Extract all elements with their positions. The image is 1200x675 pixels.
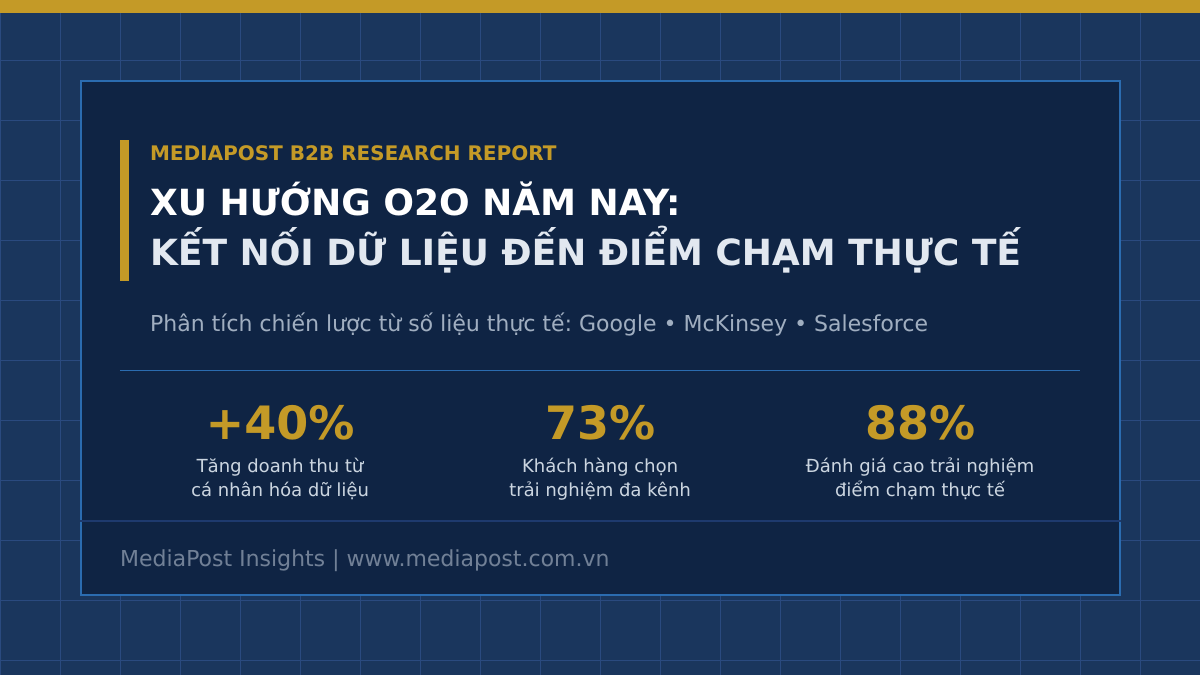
title [150, 181, 1021, 274]
stat value: +40% [206, 396, 354, 450]
stat label [191, 456, 369, 501]
stat label [509, 456, 691, 501]
stat: 73% [509, 396, 691, 501]
accent bar [120, 140, 129, 281]
stat label: Khách hàng chọn [522, 456, 678, 477]
stat: 88% [806, 396, 1034, 501]
panel: main card [81, 81, 1120, 595]
eyebrow heading: MEDIAPOST B2B RESEARCH REPORT [150, 141, 557, 165]
stat label: Tăng doanh thu từ [196, 456, 365, 477]
stat label [806, 456, 1034, 501]
top gold bar [0, 0, 1200, 13]
title: KẾT NỐI DỮ LIỆU ĐẾN ĐIỂM CHẠM THỰC TẾ [150, 225, 1021, 274]
stat value: 88% [865, 396, 975, 450]
subtitle: Phân tích chiến lược từ số liệu thực tế: Google • McKinsey • Salesforce [150, 312, 928, 337]
stat: +40% [191, 396, 369, 501]
stat value: 73% [545, 396, 655, 450]
stat label: trải nghiệm đa kênh [509, 480, 691, 501]
stat label: cá nhân hóa dữ liệu [191, 480, 369, 501]
title: XU HƯỚNG O2O NĂM NAY: [150, 181, 680, 224]
stat label: điểm chạm thực tế [835, 480, 1006, 501]
stat label: Đánh giá cao trải nghiệm [806, 456, 1034, 477]
footer text: MediaPost Insights | www.mediapost.com.vn [120, 547, 609, 572]
